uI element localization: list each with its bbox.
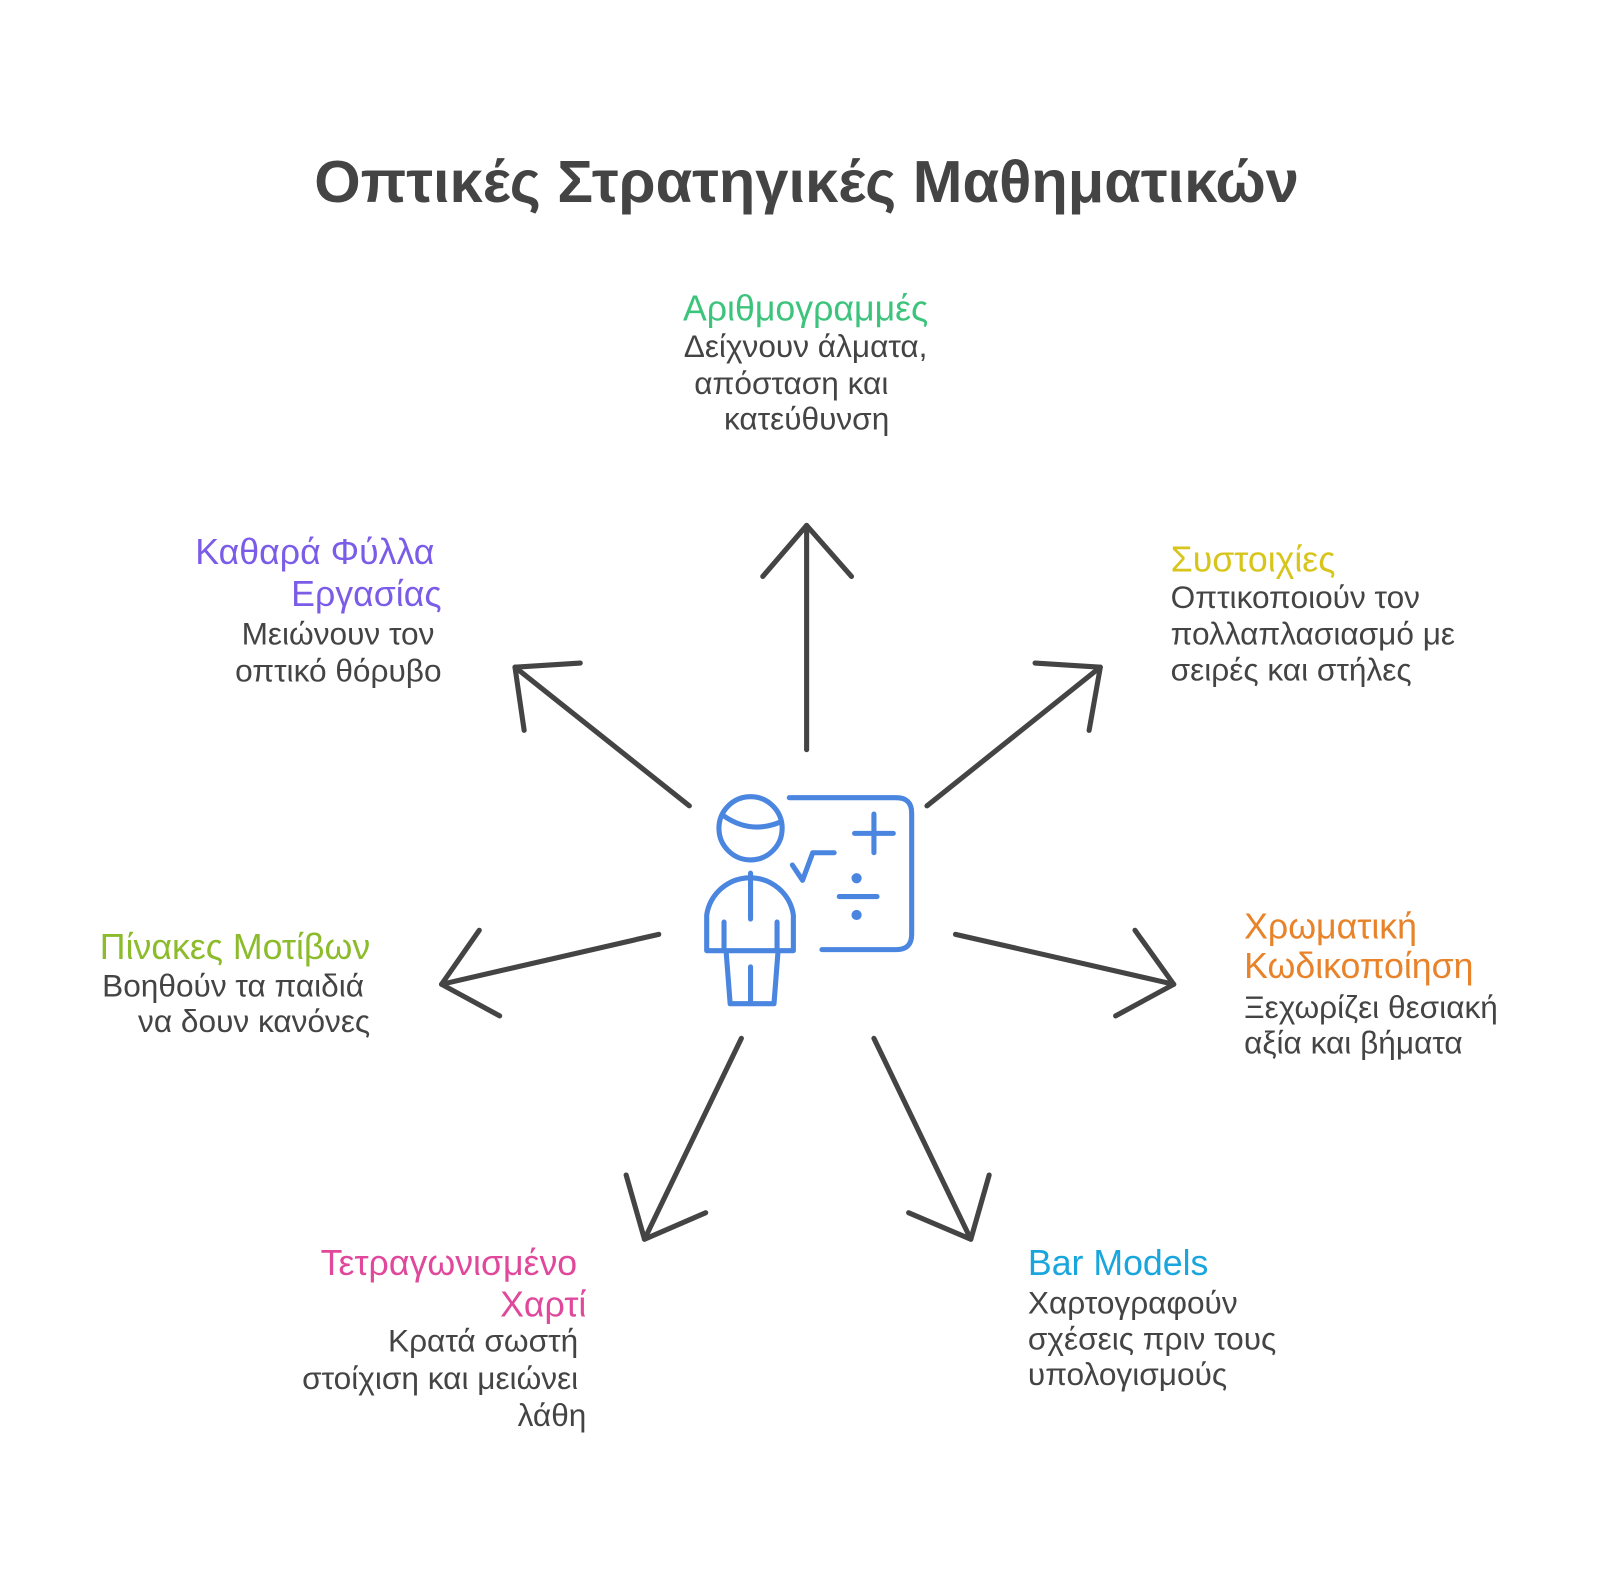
text: Bar Models: Χαρτογραφούν <box>1028 1285 1238 1321</box>
icon: teacher at board <box>707 797 912 1004</box>
arrow: bottom-left <box>626 1038 741 1239</box>
text: Καθαρά Φύλλα Εργασίας: οπτικό θόρυβο <box>235 652 442 688</box>
text: Bar Models: υπολογισμούς <box>1028 1356 1227 1392</box>
title: Οπτικές Στρατηγικές Μαθηματικών <box>314 148 1299 215</box>
text: Συστοιχίες: σειρές και στήλες <box>1171 651 1412 687</box>
text: Συστοιχίες: Συστοιχίες <box>1171 539 1335 579</box>
text: Καθαρά Φύλλα Εργασίας <box>195 532 442 688</box>
text: Καθαρά Φύλλα Εργασίας: Εργασίας <box>291 574 442 614</box>
text: Τετραγωνισμένο Χαρτί: Κρατά σωστή <box>388 1322 578 1358</box>
text: Bar Models: σχέσεις πριν τους <box>1028 1320 1276 1356</box>
text: Χρωματική Κωδικοποίηση: Ξεχωρίζει θεσιακή <box>1244 989 1498 1025</box>
text: Τετραγωνισμένο Χαρτί: στοίχιση και μειώνει <box>302 1360 578 1396</box>
text: Bar Models <box>1028 1243 1276 1392</box>
text: Χρωματική Κωδικοποίηση <box>1244 906 1498 1061</box>
text: Τετραγωνισμένο Χαρτί: Χαρτί <box>500 1285 586 1325</box>
text: Συστοιχίες: πολλαπλασιασμό με <box>1171 616 1455 652</box>
text: Bar Models: Bar Models <box>1028 1243 1208 1283</box>
text: Χρωματική Κωδικοποίηση: Χρωματική <box>1244 906 1417 946</box>
text: Αριθμογραμμές: Δείχνουν άλματα, <box>684 328 927 364</box>
arrow: left <box>442 930 659 1016</box>
text: Καθαρά Φύλλα Εργασίας: Μειώνουν τον <box>242 616 434 652</box>
text: Συστοιχίες: Οπτικοποιούν τον <box>1171 579 1420 615</box>
text: Χρωματική Κωδικοποίηση: αξία και βήματα <box>1244 1025 1463 1061</box>
text: Αριθμογραμμές: κατεύθυνση <box>724 401 889 437</box>
arrow: upper-right <box>927 663 1100 806</box>
text: Συστοιχίες <box>1171 539 1455 687</box>
text: Πίνακες Μοτίβων: Βοηθούν τα παιδιά <box>102 968 364 1004</box>
text: Αριθμογραμμές <box>683 288 928 437</box>
text: Τετραγωνισμένο Χαρτί <box>302 1243 586 1433</box>
arrow: up <box>763 525 851 750</box>
text: Χρωματική Κωδικοποίηση: Κωδικοποίηση <box>1244 946 1473 986</box>
text: Αριθμογραμμές: Αριθμογραμμές <box>683 288 928 328</box>
text: Τετραγωνισμένο Χαρτί: λάθη <box>518 1397 586 1433</box>
text: Τετραγωνισμένο Χαρτί: Τετραγωνισμένο <box>321 1243 577 1283</box>
text: Πίνακες Μοτίβων: Πίνακες Μοτίβων <box>100 927 370 967</box>
text: Πίνακες Μοτίβων <box>100 927 370 1039</box>
arrow: bottom-right <box>874 1038 989 1239</box>
arrows <box>442 525 1174 1239</box>
text: Καθαρά Φύλλα Εργασίας: Καθαρά Φύλλα <box>195 532 434 572</box>
arrow: upper-left <box>515 663 689 806</box>
text: Αριθμογραμμές: απόσταση και <box>694 365 888 401</box>
arrow: right <box>956 930 1174 1016</box>
text: Πίνακες Μοτίβων: να δουν κανόνες <box>138 1003 370 1039</box>
